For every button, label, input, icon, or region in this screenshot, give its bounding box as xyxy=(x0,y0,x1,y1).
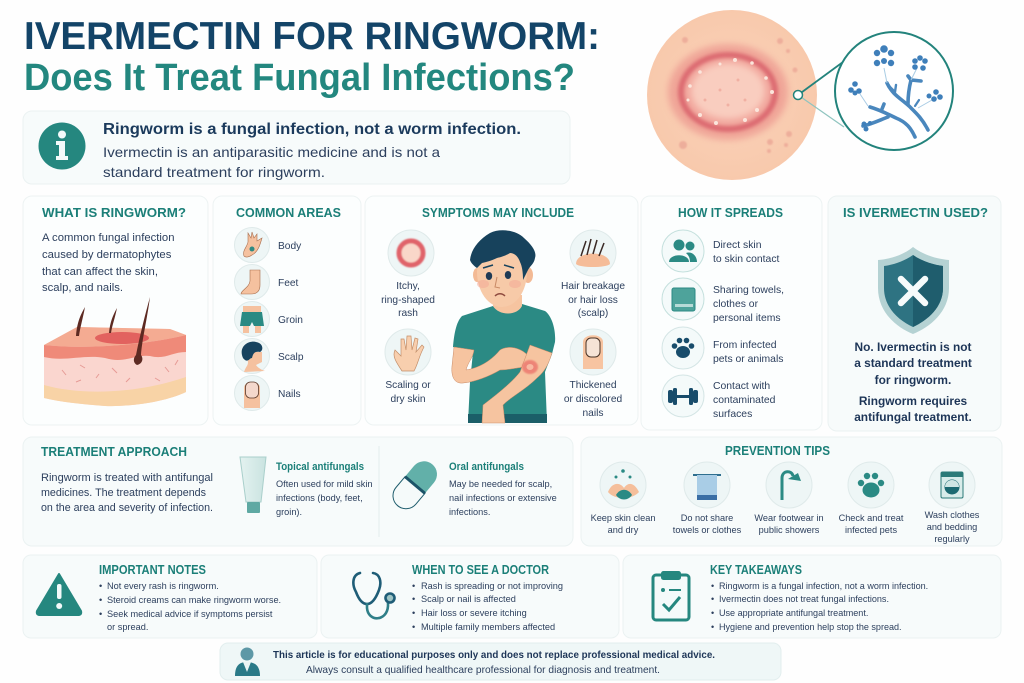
tip: wash clothes xyxy=(925,462,980,544)
oral antifungals: nail infections or extensive xyxy=(449,493,557,503)
item: groin xyxy=(234,302,303,336)
illustration: person scratching arm xyxy=(452,230,555,423)
heading: WHAT IS RINGWORM? xyxy=(42,206,186,220)
tip: do not share towels: Do not share xyxy=(681,513,733,523)
title: Does It Treat Fungal Infections? xyxy=(24,57,575,99)
oral antifungals: infections. xyxy=(449,507,490,517)
icon: warning triangle xyxy=(37,574,81,615)
tip: wear footwear: Wear footwear in xyxy=(754,513,824,523)
item: nails xyxy=(234,376,301,410)
tip: check pets: infected pets xyxy=(845,525,897,535)
bullet list: Use appropriate antifungal treatment. xyxy=(719,608,868,618)
tip: check pets xyxy=(839,462,904,535)
bullet list: Scalp or nail is affected xyxy=(421,594,516,604)
heading: SYMPTOMS MAY INCLUDE xyxy=(422,206,574,220)
disclaimer text: This article is for educational purposes only and does not replace professional medical advice. xyxy=(273,650,715,661)
item: contaminated surfaces xyxy=(662,375,776,420)
item: scalp xyxy=(234,338,304,374)
bullet list: • xyxy=(99,609,102,619)
heading: COMMON AREAS xyxy=(236,206,341,220)
tip: keep skin clean: and dry xyxy=(608,525,639,535)
heading: IS IVERMECTIN USED? xyxy=(843,206,988,220)
answer text: a standard treatment xyxy=(854,356,972,370)
oral antifungals: May be needed for scalp, xyxy=(449,479,552,489)
bullet list: Ringworm is a fungal infection, not a worm infection. xyxy=(719,581,928,591)
tip: check pets: Check and treat xyxy=(839,513,904,523)
bullet list: • xyxy=(711,608,714,618)
tip: keep skin clean xyxy=(591,462,655,535)
item: body xyxy=(234,228,302,262)
symptom: hair loss: or hair loss xyxy=(568,295,618,306)
item: pets: pets or animals xyxy=(713,354,783,365)
bullet list: Rash is spreading or not improving xyxy=(421,581,563,591)
panel: common areas xyxy=(213,196,361,425)
item: direct contact: Direct skin xyxy=(713,240,762,251)
symptom: rash: Itchy, xyxy=(396,281,420,292)
symptom: scaling: dry skin xyxy=(390,394,426,405)
bullet list: Seek medical advice if symptoms persist xyxy=(107,609,273,619)
item: body: Body xyxy=(278,241,302,252)
callout heading: Ringworm is a fungal infection, not a worm infection. xyxy=(103,121,521,138)
item: contaminated surfaces: surfaces xyxy=(713,409,752,420)
topical antifungals xyxy=(276,461,373,517)
body text: that can affect the skin, xyxy=(42,266,158,278)
illustration: ringworm lesion on skin xyxy=(647,10,817,180)
body text: on the area and severity of infection. xyxy=(41,502,213,514)
tip: keep skin clean: Keep skin clean xyxy=(591,513,655,523)
callout text xyxy=(103,145,440,180)
icon: info xyxy=(38,122,86,170)
disclaimer text xyxy=(273,650,715,676)
answer text: antifungal treatment. xyxy=(854,410,972,424)
symptom: scaling xyxy=(385,329,431,405)
icon: clipboard xyxy=(653,571,689,620)
bullet list: • xyxy=(412,594,415,604)
panel: when to see a doctor xyxy=(321,555,619,638)
item: scalp: Scalp xyxy=(278,352,304,363)
icon: shield with cross xyxy=(878,247,949,334)
panel: info callout xyxy=(23,111,570,184)
bullet list: • xyxy=(711,581,714,591)
symptom: nails: nails xyxy=(583,408,603,419)
bullet list: • xyxy=(99,581,102,591)
answer text xyxy=(854,340,972,424)
tip: do not share towels xyxy=(673,462,742,535)
bullet list: Not every rash is ringworm. xyxy=(107,581,219,591)
bullet list: Ivermectin does not treat fungal infections. xyxy=(719,594,889,604)
body text: Ringworm is treated with antifungal xyxy=(41,472,213,484)
panel: is ivermectin used xyxy=(828,196,1001,431)
panel: treatment approach xyxy=(23,437,573,546)
topical antifungals: infections (body, feet, xyxy=(276,493,363,503)
symptom: rash: rash xyxy=(398,308,418,319)
heading: HOW IT SPREADS xyxy=(678,206,783,220)
topical antifungals: Topical antifungals xyxy=(276,461,364,473)
tip: wash clothes: Wash clothes xyxy=(925,510,980,520)
disclaimer text: Always consult a qualified healthcare professional for diagnosis and treatment. xyxy=(306,665,660,676)
icon: doctor xyxy=(235,648,260,676)
icon: capsule xyxy=(388,456,442,514)
bullet list xyxy=(711,581,928,632)
bullet list: Multiple family members affected xyxy=(421,622,555,632)
title xyxy=(24,15,600,99)
item: groin: Groin xyxy=(278,315,303,326)
topical antifungals: groin). xyxy=(276,507,302,517)
panel: important notes xyxy=(23,555,317,638)
heading: KEY TAKEAWAYS xyxy=(710,563,802,577)
bullet list xyxy=(412,581,563,632)
bullet list: • xyxy=(412,608,415,618)
symptom: hair loss xyxy=(561,230,625,319)
answer text: for ringworm. xyxy=(875,373,951,387)
tip: wear footwear: public showers xyxy=(759,525,820,535)
symptom: rash: ring-shaped xyxy=(381,295,435,306)
panel: key takeaways xyxy=(623,555,1001,638)
bullet list: • xyxy=(412,581,415,591)
symptom: nails xyxy=(564,329,622,419)
callout text: standard treatment for ringworm. xyxy=(103,165,325,180)
panel: what is ringworm xyxy=(23,196,208,425)
symptom: hair loss: Hair breakage xyxy=(561,281,625,292)
item: sharing towels xyxy=(662,278,784,324)
symptom: rash xyxy=(381,230,435,319)
answer text: Ringworm requires xyxy=(859,394,968,408)
item: sharing towels: Sharing towels, xyxy=(713,285,784,296)
bullet list: Hygiene and prevention help stop the spread. xyxy=(719,622,902,632)
symptom: scaling: Scaling or xyxy=(385,380,431,391)
body text xyxy=(41,472,213,514)
heading: PREVENTION TIPS xyxy=(725,444,830,458)
body text: caused by dermatophytes xyxy=(42,249,172,261)
icon: cream tube xyxy=(240,457,266,513)
symptom: nails: Thickened xyxy=(569,380,617,391)
illustration: skin cross-section xyxy=(44,297,186,406)
topical antifungals: Often used for mild skin xyxy=(276,479,373,489)
bullet list: • xyxy=(711,622,714,632)
heading: IMPORTANT NOTES xyxy=(99,563,206,577)
bullet list xyxy=(99,581,281,632)
bullet list: Steroid creams can make ringworm worse. xyxy=(107,595,281,605)
bullet list: Hair loss or severe itching xyxy=(421,608,527,618)
bullet list: • xyxy=(711,594,714,604)
heading: TREATMENT APPROACH xyxy=(41,445,187,459)
symptom: hair loss: (scalp) xyxy=(578,308,608,319)
title: IVERMECTIN FOR RINGWORM: xyxy=(24,15,600,58)
callout text: Ivermectin is an antiparasitic medicine and is not a xyxy=(103,145,440,160)
body text xyxy=(42,232,175,294)
item: pets xyxy=(662,327,783,369)
answer text: No. Ivermectin is not xyxy=(855,340,972,354)
oral antifungals xyxy=(449,461,557,517)
oral antifungals: Oral antifungals xyxy=(449,461,524,473)
body text: A common fungal infection xyxy=(42,232,175,244)
bullet list: • xyxy=(412,622,415,632)
item: sharing towels: personal items xyxy=(713,313,781,324)
icon: magnified fungus xyxy=(794,32,953,150)
item: feet: Feet xyxy=(278,278,299,289)
item: pets: From infected xyxy=(713,340,777,351)
item: nails: Nails xyxy=(278,389,301,400)
item: contaminated surfaces: Contact with xyxy=(713,381,770,392)
panel: how it spreads xyxy=(641,196,822,430)
item: sharing towels: clothes or xyxy=(713,299,759,310)
tip: wash clothes: and bedding xyxy=(927,522,977,532)
tip: wash clothes: regularly xyxy=(934,534,970,544)
icon: stethoscope xyxy=(353,573,394,618)
tip: wear footwear xyxy=(754,462,824,535)
bullet list: or spread. xyxy=(107,622,148,632)
bullet list: • xyxy=(99,595,102,605)
body text: medicines. The treatment depends xyxy=(41,487,206,499)
panel: prevention tips xyxy=(581,437,1002,546)
item: direct contact xyxy=(662,230,780,272)
item: feet xyxy=(234,264,299,300)
body text: scalp, and nails. xyxy=(42,282,123,294)
tip: do not share towels: towels or clothes xyxy=(673,525,742,535)
heading: WHEN TO SEE A DOCTOR xyxy=(412,563,549,577)
panel: symptoms xyxy=(365,196,638,425)
item: contaminated surfaces: contaminated xyxy=(713,395,776,406)
item: direct contact: to skin contact xyxy=(713,254,780,265)
symptom: nails: or discolored xyxy=(564,394,622,405)
panel: disclaimer xyxy=(220,643,781,680)
